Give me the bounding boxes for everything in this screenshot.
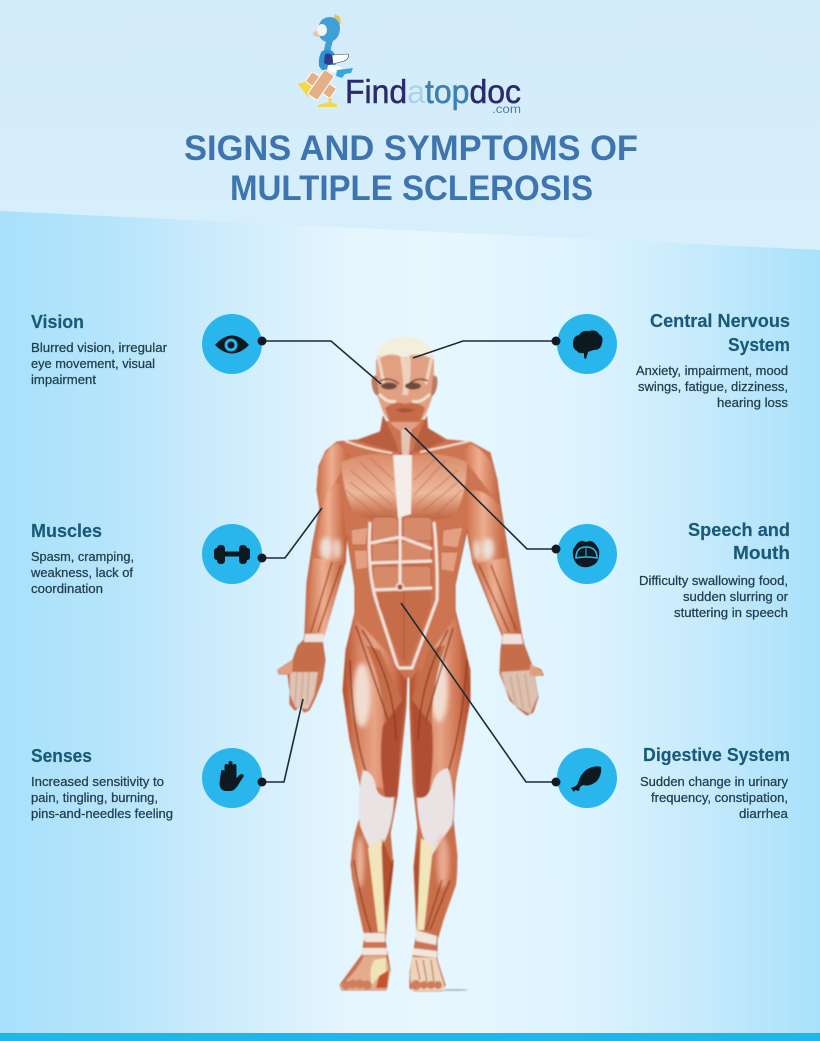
panel: senses	[31, 746, 266, 821]
text: senses symptoms: pins-and-needles feeling	[31, 807, 173, 821]
panel: vision	[31, 312, 266, 387]
text: digestive symptoms: Sudden change in urinary	[640, 775, 789, 789]
text: senses symptoms: Increased sensitivity to	[31, 775, 164, 789]
deltoid right	[462, 443, 500, 505]
deltoid left	[317, 443, 350, 510]
title	[184, 129, 638, 208]
text: digestive symptoms	[640, 775, 789, 821]
text: muscle symptoms	[30, 550, 134, 596]
heading: central nervous system: System	[728, 335, 790, 355]
icon: brain	[552, 314, 617, 374]
mouth	[395, 408, 415, 412]
ears	[372, 376, 438, 396]
thumb left	[278, 660, 293, 674]
text: nervous system symptoms	[636, 364, 788, 410]
text: muscle symptoms: Spasm, cramping,	[31, 550, 134, 564]
logo wordmark: Findatopdoc	[345, 73, 521, 110]
text: speech symptoms: sudden slurring or	[683, 590, 788, 604]
sternum	[393, 455, 412, 518]
thigh left	[343, 618, 406, 790]
forearm right	[474, 558, 520, 634]
heading: speech and mouth: Mouth	[733, 543, 790, 563]
body silhouette	[278, 420, 543, 991]
foot left	[340, 956, 390, 990]
pectorals	[341, 454, 398, 519]
foot right	[410, 957, 444, 991]
text: nervous system symptoms: Anxiety, impairment, mood	[636, 364, 788, 378]
calves	[351, 822, 393, 938]
obliques	[351, 527, 463, 572]
heading: muscles: Muscles	[31, 521, 102, 541]
thigh inner muscles	[381, 700, 403, 797]
neck	[358, 415, 445, 455]
text: senses symptoms: pain, tingling, burning,	[31, 791, 158, 805]
logo: .com	[492, 104, 521, 116]
anatomy figure	[278, 337, 543, 991]
lower abdominals	[377, 592, 431, 664]
heading: speech and mouth	[688, 520, 790, 563]
ankle bands	[362, 930, 437, 958]
text: speech symptoms: stuttering in speech	[674, 606, 788, 620]
panel: digestive system	[552, 745, 790, 821]
heading: central nervous system: Central Nervous	[650, 311, 790, 331]
navel	[396, 584, 404, 590]
icon: mouth	[552, 524, 617, 584]
shin tendons	[368, 838, 385, 932]
heading: digestive system: Digestive System	[643, 745, 790, 765]
head skull cap	[376, 337, 434, 372]
icon: chicken leg	[552, 748, 617, 808]
text: speech symptoms	[639, 574, 788, 620]
text: nervous system symptoms: swings, fatigue, dizziness,	[638, 380, 788, 394]
panel: speech and mouth	[552, 520, 790, 620]
text: vision symptoms: impairment	[31, 373, 97, 387]
title: MULTIPLE SCLEROSIS	[230, 169, 593, 208]
leader lines	[262, 341, 556, 782]
thumb right	[530, 664, 543, 676]
heading: senses: Senses	[31, 746, 92, 766]
heading: vision: Vision	[31, 312, 84, 332]
text: speech symptoms: Difficulty swallowing food,	[639, 574, 788, 588]
forearm left	[306, 558, 345, 634]
face	[376, 354, 434, 432]
icon: duck mascot	[298, 14, 353, 107]
icon: hand	[202, 748, 266, 808]
logo	[298, 14, 521, 116]
upper arm left	[314, 483, 346, 565]
eyes	[381, 382, 397, 390]
text: muscle symptoms: weakness, lack of	[30, 566, 134, 580]
thigh right	[410, 618, 470, 790]
heading: speech and mouth: Speech and	[688, 520, 790, 540]
panel: central nervous system	[552, 311, 790, 410]
icon: bandage	[305, 69, 337, 101]
text: vision symptoms	[31, 341, 167, 387]
icon: dumbbell	[202, 524, 266, 584]
floor shadow	[440, 989, 468, 991]
hand right	[500, 644, 531, 672]
text: digestive symptoms: frequency, constipation,	[651, 791, 788, 805]
text: senses symptoms	[31, 775, 173, 821]
icon: eye	[202, 314, 266, 374]
text: digestive symptoms: diarrhea	[739, 807, 788, 821]
elbow highlights	[320, 537, 332, 559]
title: SIGNS AND SYMPTOMS OF	[184, 129, 638, 168]
wrist bands	[304, 634, 523, 644]
upper arm right	[465, 490, 506, 565]
heading: central nervous system	[650, 311, 790, 355]
text: vision symptoms: eye movement, visual	[31, 357, 155, 371]
hand left	[292, 642, 325, 672]
panel: muscles	[30, 521, 266, 596]
text: vision symptoms: Blurred vision, irregular	[31, 341, 167, 355]
text: muscle symptoms: coordination	[31, 582, 103, 596]
linea alba and tendons	[369, 517, 437, 668]
knees	[359, 770, 394, 858]
abdominal muscles	[372, 517, 432, 590]
text: nervous system symptoms: hearing loss	[717, 396, 788, 410]
